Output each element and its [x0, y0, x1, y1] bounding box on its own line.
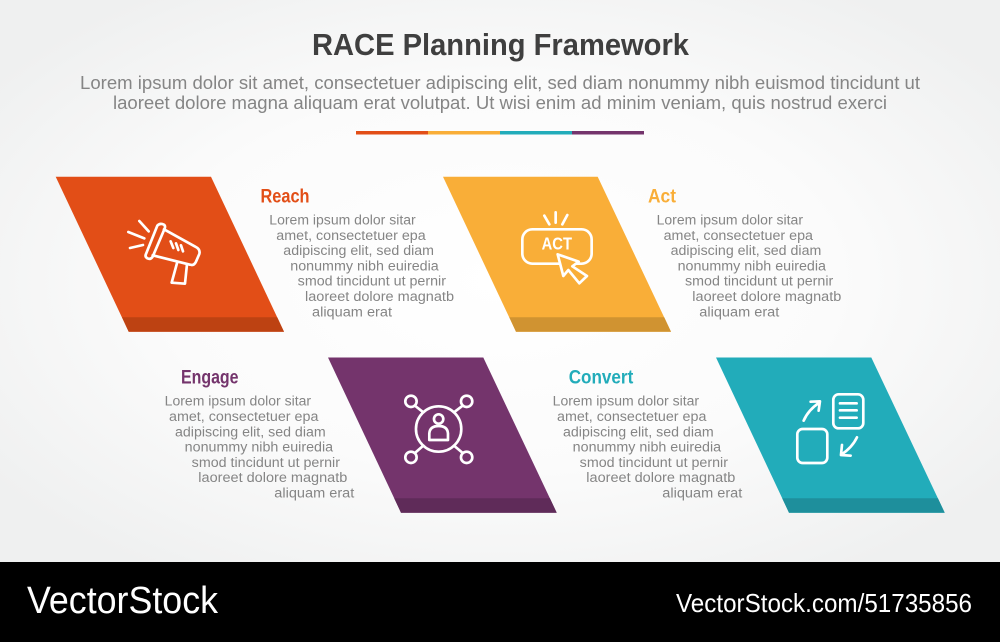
engage body text: nonummy nibh euiredia [185, 440, 334, 455]
act body text: laoreet dolore magnatb [692, 289, 841, 304]
convert body text [553, 394, 743, 500]
act body text [657, 212, 841, 319]
subtitle text: laoreet dolore magna aliquam erat volutpat. Ut wisi enim ad minim veniam, quis nostrud exerci [113, 92, 887, 113]
reach body text: laoreet dolore magnatb [305, 289, 454, 304]
icon: megaphone [128, 221, 200, 284]
act parallelogram [443, 177, 671, 332]
engage body text: smod tincidunt ut pernir [192, 455, 341, 470]
act body text: amet, consectetuer epa [664, 228, 814, 243]
colour divider [356, 131, 644, 134]
reach body text: aliquam erat [312, 304, 392, 319]
icon: act button with cursor [522, 212, 592, 283]
footer bar [0, 562, 1000, 642]
reach parallelogram [56, 177, 284, 332]
icon: conversion arrows [797, 394, 863, 463]
convert heading: Convert [569, 368, 634, 388]
convert parallelogram [716, 358, 945, 513]
icon: network person [405, 396, 472, 463]
reach body text [269, 212, 454, 319]
subtitle text: Lorem ipsum dolor sit amet, consectetuer adipiscing elit, sed diam nonummy nibh euismod tincidunt ut [80, 72, 920, 93]
act body text: smod tincidunt ut pernir [685, 274, 834, 289]
reach body text: adipiscing elit, sed diam [283, 243, 434, 258]
convert body text: amet, consectetuer epa [557, 409, 707, 424]
reach body text: amet, consectetuer epa [276, 228, 426, 243]
panel: reach [56, 177, 454, 332]
icon: act button with cursor: ACT [542, 233, 572, 253]
engage body text: aliquam erat [274, 486, 355, 500]
reach body text: nonummy nibh euiredia [290, 258, 439, 273]
act body text: nonummy nibh euiredia [678, 258, 827, 273]
engage body text: Lorem ipsum dolor sitar [165, 394, 312, 409]
title: RACE Planning Framework [312, 27, 690, 62]
convert body text: adipiscing elit, sed diam [563, 424, 714, 439]
footer logo text: VectorStock [27, 580, 219, 622]
act heading: Act [648, 186, 677, 208]
convert body text: aliquam erat [662, 486, 743, 500]
engage body text [165, 394, 355, 500]
act body text: Lorem ipsum dolor sitar [657, 212, 804, 228]
subtitle text [80, 72, 920, 113]
reach body text: smod tincidunt ut pernir [298, 274, 447, 289]
engage heading: Engage [181, 368, 238, 388]
footer image id text: VectorStock.com/51735856 [676, 588, 972, 618]
engage body text: laoreet dolore magnatb [198, 470, 347, 485]
reach heading: Reach [260, 186, 310, 208]
panel: convert [553, 358, 945, 513]
engage body text: amet, consectetuer epa [169, 409, 319, 424]
engage body text: adipiscing elit, sed diam [175, 424, 326, 439]
panel: act [443, 177, 841, 332]
reach body text: Lorem ipsum dolor sitar [269, 212, 416, 228]
convert body text: smod tincidunt ut pernir [580, 455, 729, 470]
engage parallelogram [328, 358, 557, 513]
convert body text: Lorem ipsum dolor sitar [553, 394, 700, 409]
act body text: adipiscing elit, sed diam [671, 243, 821, 258]
act body text: aliquam erat [699, 304, 780, 319]
convert body text: nonummy nibh euiredia [573, 440, 722, 455]
convert body text: laoreet dolore magnatb [586, 470, 735, 485]
panel: engage [165, 358, 557, 513]
